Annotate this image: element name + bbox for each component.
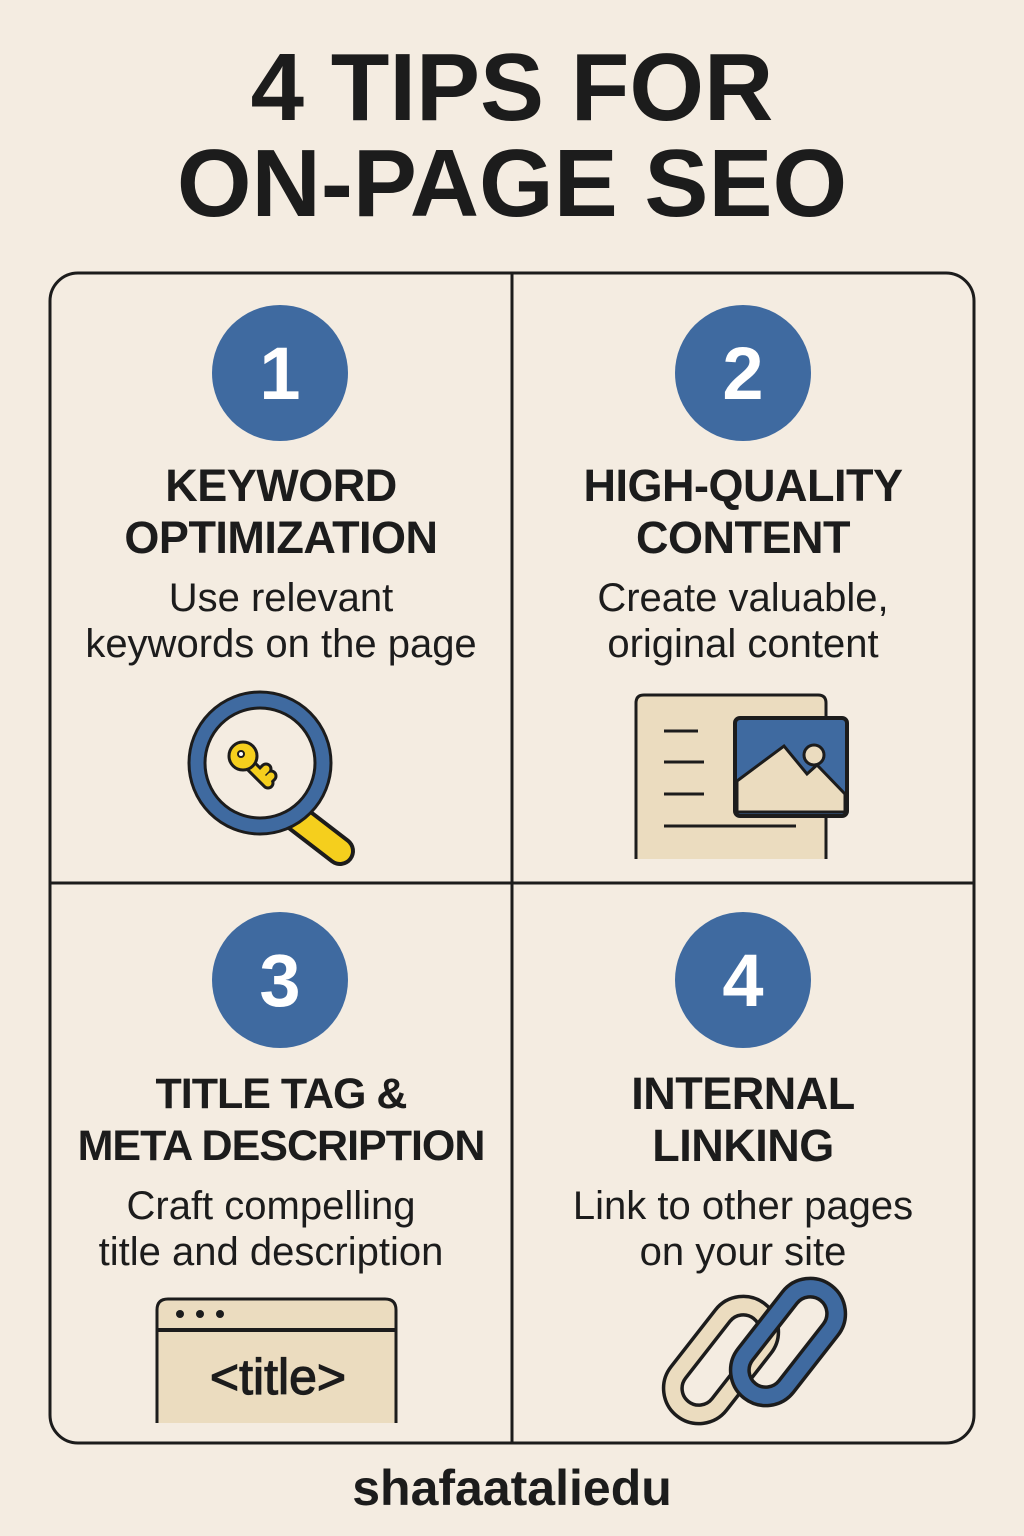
heading [124, 460, 438, 563]
description: on your site [640, 1230, 846, 1274]
description [99, 1184, 443, 1274]
icon: browser title tag: <title> [210, 1349, 346, 1405]
description: Link to other pages [573, 1184, 913, 1228]
number badge 2 [675, 305, 811, 441]
description: Craft compelling [126, 1184, 416, 1228]
number badge 2: 2 [722, 332, 764, 415]
description [573, 1184, 913, 1274]
heading [584, 460, 902, 563]
heading: TITLE TAG & [156, 1070, 406, 1118]
heading: OPTIMIZATION [124, 512, 438, 563]
title [177, 34, 847, 237]
panel: title tag & meta description [78, 912, 484, 1423]
icon: document with image [634, 694, 849, 859]
number badge 3 [212, 912, 348, 1048]
heading: KEYWORD [165, 460, 397, 511]
description: Create valuable, [597, 576, 889, 620]
heading [78, 1070, 484, 1170]
heading [631, 1068, 855, 1171]
heading: META DESCRIPTION [78, 1122, 484, 1170]
heading: LINKING [652, 1120, 834, 1171]
description: keywords on the page [85, 622, 477, 666]
number badge 1 [212, 305, 348, 441]
number badge 4: 4 [722, 939, 764, 1022]
description: original content [607, 622, 879, 666]
heading: HIGH-QUALITY [584, 460, 902, 511]
heading: INTERNAL [631, 1068, 855, 1119]
title: ON-PAGE SEO [177, 130, 847, 237]
title: 4 TIPS FOR [251, 34, 773, 141]
number badge 4 [675, 912, 811, 1048]
footer: brand: shafaataliedu [352, 1460, 672, 1516]
panel: high-quality content [584, 305, 902, 859]
description [597, 576, 889, 666]
heading: CONTENT [636, 512, 850, 563]
icon: chain links [662, 1276, 848, 1426]
panel: keyword optimization [85, 305, 477, 866]
panel: internal linking [573, 912, 913, 1426]
number badge 1: 1 [259, 332, 301, 415]
icon: magnifier with key [188, 690, 355, 866]
description: title and description [99, 1230, 443, 1274]
description [85, 576, 477, 666]
description: Use relevant [169, 576, 393, 620]
icon: browser title tag [156, 1298, 398, 1423]
number badge 3: 3 [259, 939, 301, 1022]
